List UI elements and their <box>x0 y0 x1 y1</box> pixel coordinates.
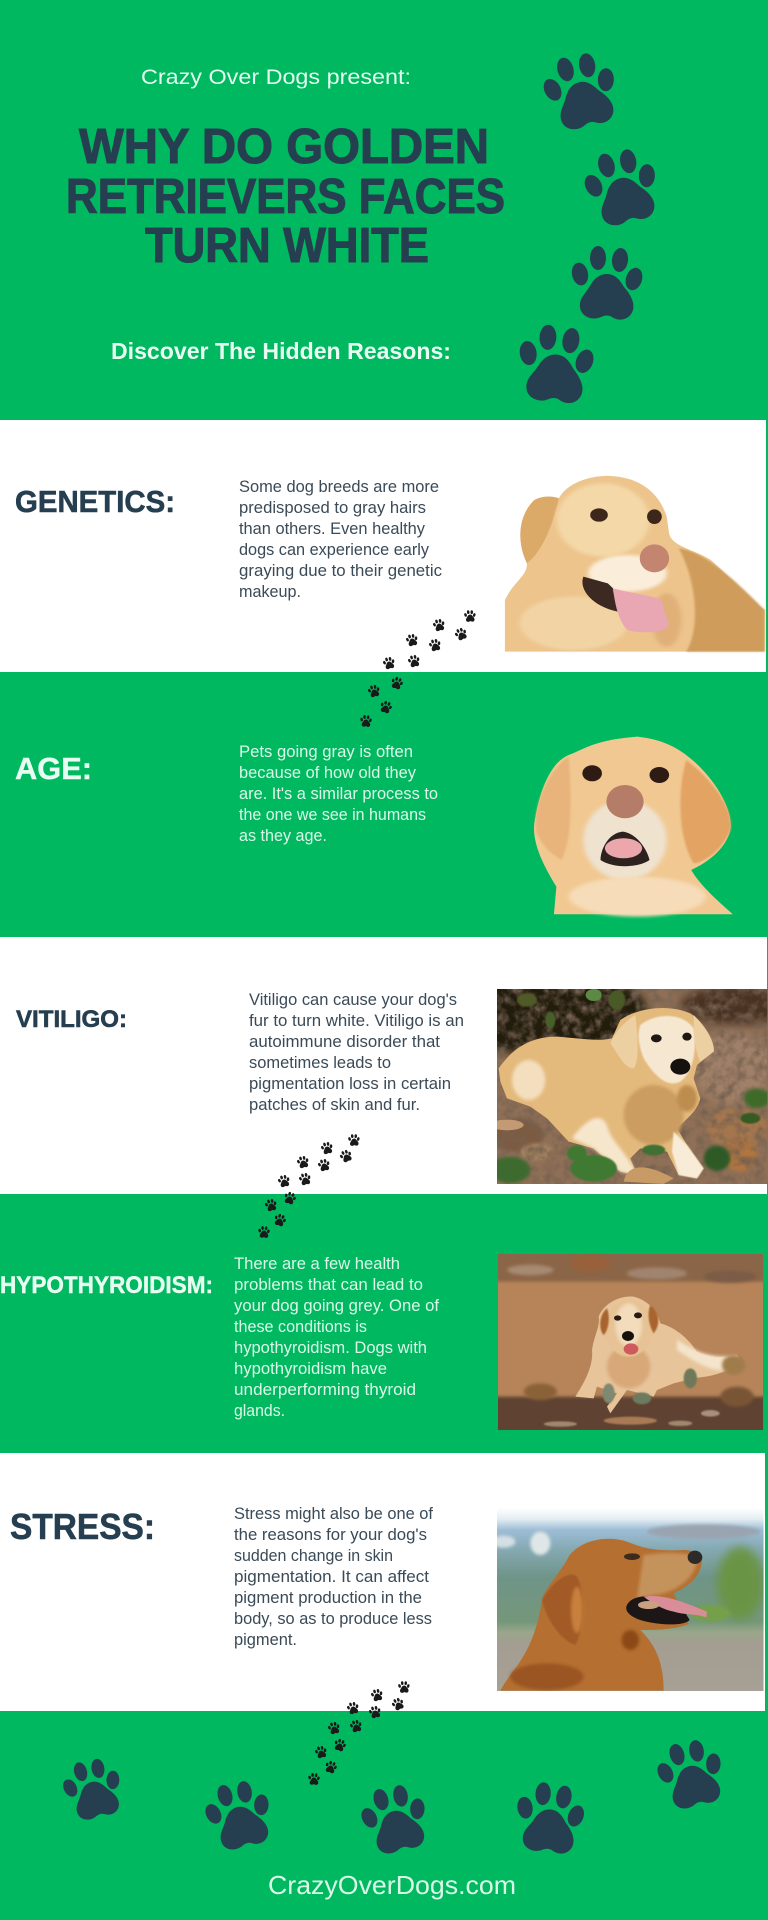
text: genetics <box>239 477 442 601</box>
text: vitiligo: sometimes leads to <box>249 1053 391 1072</box>
text: age: because of how old they <box>239 763 416 782</box>
text: stress: pigment production in the <box>234 1588 422 1607</box>
title: WHY DO GOLDEN <box>79 120 489 174</box>
section: genetics <box>15 476 765 652</box>
text: vitiligo: Vitiligo can cause your dog's <box>249 990 457 1009</box>
text: hypothyroidism: There are a few health <box>234 1254 400 1273</box>
text: vitiligo: patches of skin and fur. <box>249 1095 420 1114</box>
icons: large paw prints <box>515 45 669 405</box>
text: stress: sudden change in skin <box>234 1546 393 1565</box>
text: genetics: predisposed to gray hairs <box>239 498 426 517</box>
text: hypothyroidism: your dog going grey. One of <box>234 1296 439 1315</box>
text: genetics: Some dog breeds are more <box>239 477 439 496</box>
text: age: as they age. <box>239 826 327 845</box>
text: stress: Stress might also be one of <box>234 1504 433 1523</box>
text: hypothyroidism: hypothyroidism. Dogs with <box>234 1338 427 1357</box>
trail: small paw prints stress to footer <box>308 1681 411 1785</box>
panel: header <box>66 45 669 405</box>
text: stress: the reasons for your dog's <box>234 1525 427 1544</box>
heading: age: AGE: <box>15 751 92 786</box>
text: hypothyroidism: glands. <box>234 1401 285 1420</box>
text: vitiligo: fur to turn white. Vitiligo is an <box>249 1011 464 1030</box>
text: vitiligo: pigmentation loss in certain <box>249 1074 451 1093</box>
panel: footer <box>56 1733 733 1900</box>
text: hypothyroidism: underperforming thyroid <box>234 1380 416 1399</box>
text: genetics: than others. Even healthy <box>239 519 425 538</box>
presenter line: Crazy Over Dogs present: <box>141 66 411 89</box>
panel: stress background <box>0 1453 765 1711</box>
text: age: Pets going gray is often <box>239 742 413 761</box>
section: stress <box>10 1504 764 1691</box>
trail: small paw prints vitiligo to hypothyroidism <box>258 1134 361 1238</box>
heading: stress: STRESS: <box>10 1506 155 1547</box>
title <box>66 120 505 273</box>
text: stress: body, so as to produce less <box>234 1609 432 1628</box>
image: smiling golden retriever cutout <box>505 476 765 652</box>
section: vitiligo <box>16 968 768 1184</box>
text: age: are. It's a similar process to <box>239 784 438 803</box>
subtitle: Discover The Hidden Reasons: <box>111 338 451 364</box>
text: genetics: graying due to their genetic <box>239 561 442 580</box>
text: vitiligo: autoimmune disorder that <box>249 1032 440 1051</box>
text: stress <box>234 1504 433 1649</box>
text: hypothyroidism: these conditions is <box>234 1317 367 1336</box>
section: age <box>15 737 733 917</box>
text: age <box>239 742 438 845</box>
panel: vitiligo background <box>0 937 767 1194</box>
text: hypothyroidism <box>234 1254 439 1420</box>
text: age: the one we see in humans <box>239 805 426 824</box>
title: TURN WHITE <box>145 219 429 273</box>
heading: hypothyroidism: HYPOTHYROIDISM: <box>0 1272 213 1299</box>
icons: row of large paw prints <box>56 1733 733 1860</box>
photo: golden retriever lying on dirt <box>498 1254 763 1430</box>
panel: genetics background <box>0 420 766 672</box>
trail: small paw prints genetics to age <box>360 610 477 727</box>
photo: golden retriever profile <box>492 1508 764 1691</box>
text: genetics: dogs can experience early <box>239 540 429 559</box>
heading: vitiligo: VITILIGO: <box>16 1006 127 1033</box>
text: hypothyroidism: hypothyroidism have <box>234 1359 387 1378</box>
section: hypothyroidism <box>0 1250 768 1437</box>
photo: golden retriever lying in autumn leaves <box>497 989 768 1184</box>
text: genetics: makeup. <box>239 582 301 601</box>
image: golden retriever face cutout <box>534 737 733 917</box>
text: stress: pigment. <box>234 1630 297 1649</box>
text: hypothyroidism: problems that can lead to <box>234 1275 423 1294</box>
footer url: CrazyOverDogs.com <box>268 1870 516 1900</box>
heading: genetics: GENETICS: <box>15 484 175 519</box>
title: RETRIEVERS FACES <box>66 170 505 224</box>
text: vitiligo <box>249 990 464 1114</box>
text: stress: pigmentation. It can affect <box>234 1567 429 1586</box>
